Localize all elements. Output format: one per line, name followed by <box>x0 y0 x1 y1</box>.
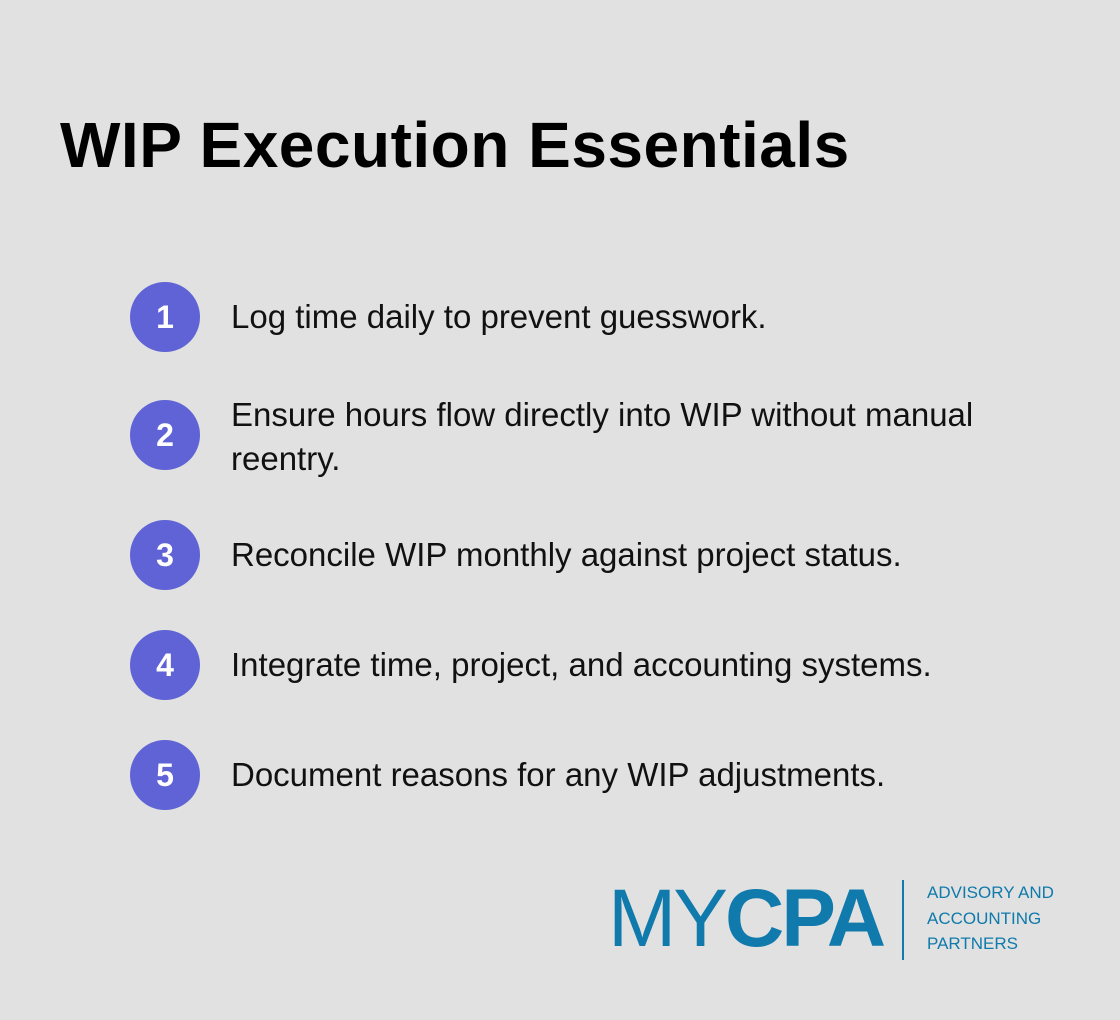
item 4: 4 <box>156 647 174 683</box>
item 3: 3 <box>156 537 174 573</box>
title: WIP Execution Essentials <box>60 109 850 181</box>
logo <box>608 873 1054 964</box>
item 3: Reconcile WIP monthly against project status. <box>231 536 902 573</box>
item 4 <box>130 630 932 700</box>
logo: ADVISORY AND <box>927 883 1054 902</box>
item 1: Log time daily to prevent guesswork. <box>231 298 767 335</box>
logo: PARTNERS <box>927 934 1018 953</box>
item 5: 5 <box>156 757 174 793</box>
item 5: Document reasons for any WIP adjustments. <box>231 756 885 793</box>
item 2: Ensure hours flow directly into WIP without manual reentry. <box>231 396 973 477</box>
item 1 <box>130 282 767 352</box>
item 4: Integrate time, project, and accounting systems. <box>231 646 932 683</box>
item 5 <box>130 740 885 810</box>
item 2: 2 <box>156 417 174 453</box>
logo: ACCOUNTING <box>927 908 1041 928</box>
logo: MYCPA <box>608 873 883 964</box>
item 3 <box>130 520 902 590</box>
item 1: 1 <box>156 299 174 335</box>
